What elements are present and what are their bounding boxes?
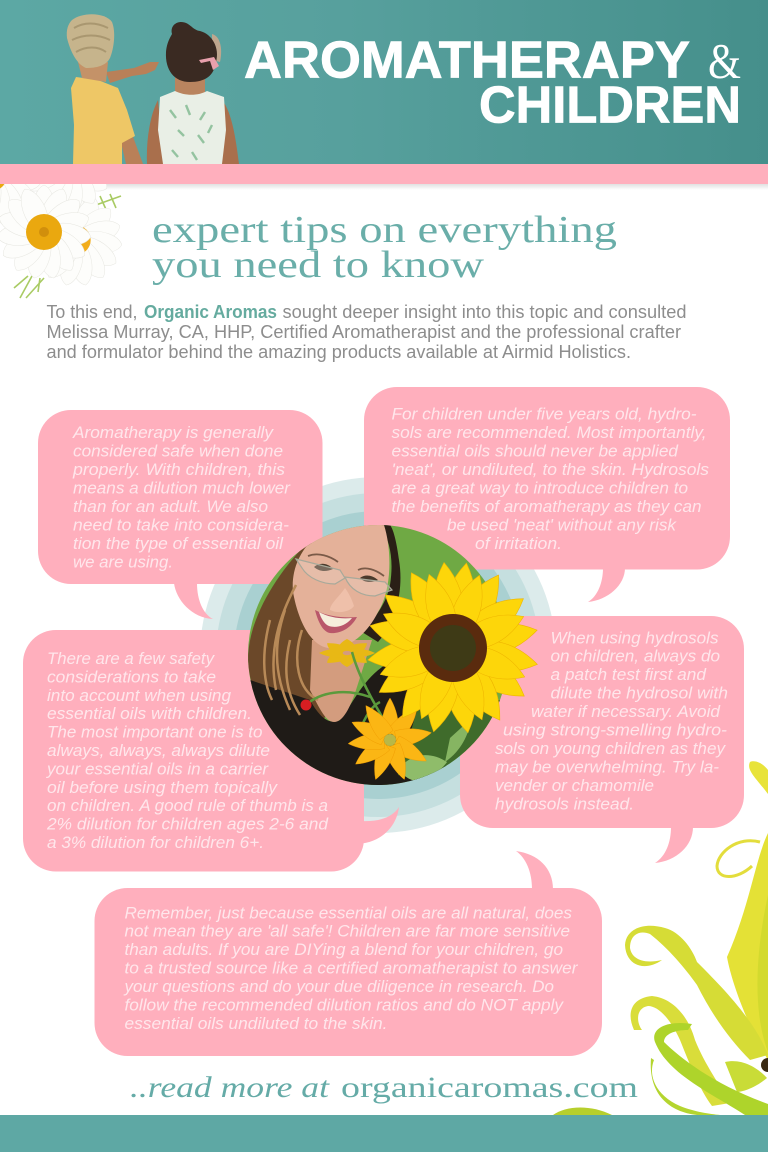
- bubble 3 text: The most important one is to: [47, 724, 262, 742]
- upper petal shadow: [757, 895, 768, 1052]
- bubble 2 text: of irritation.: [475, 535, 562, 553]
- bubble 4 text: When using hydrosols: [550, 629, 718, 647]
- bubble 5 text: to a trusted source like a certified aromatherapist to answer: [124, 960, 579, 978]
- flower centre: [761, 1058, 768, 1072]
- smile: [315, 610, 357, 633]
- bubble 4 text: using strong-smelling hydro-: [503, 722, 728, 740]
- ylang-ylang flower: [553, 761, 768, 1115]
- curled petal lower: [631, 996, 730, 1106]
- bubble 3 text: a 3% dilution for children 6+.: [47, 834, 264, 852]
- bubble 3 text: considerations to take: [47, 668, 216, 686]
- speech bubble 3: [23, 630, 399, 872]
- upper long petal: [727, 833, 768, 1060]
- concentric rings behind portrait: [200, 477, 556, 833]
- speech bubble 5: [94, 851, 602, 1056]
- bubble 4 text: may be overwhelming. Try la-: [495, 758, 720, 776]
- small yellow flower: [319, 639, 375, 667]
- main daisy: [0, 185, 92, 280]
- back daisy: [48, 198, 122, 286]
- nose: [330, 588, 354, 612]
- top curl: [749, 761, 768, 794]
- intro paragraph: To this end,: [46, 302, 138, 322]
- girl's arms: [147, 100, 239, 164]
- boy's hair: [67, 14, 114, 68]
- read more footer text: [130, 1071, 638, 1104]
- bubble 2 text: For children under five years old, hydro-: [392, 405, 697, 423]
- bubble 1 text: means a dilution much lower: [73, 480, 292, 498]
- red flower: [300, 700, 312, 710]
- girl's neck: [175, 76, 205, 98]
- bubble 3 text: [46, 650, 329, 852]
- glasses: [296, 559, 392, 596]
- grass background: [248, 525, 508, 785]
- girl's sunglasses: [199, 57, 219, 70]
- bubble 5 text: essential oils undiluted to the skin.: [124, 1015, 388, 1033]
- bubble 5 text: [123, 904, 579, 1033]
- bottom band: [0, 1115, 768, 1152]
- bottom-left petal: [553, 1107, 612, 1115]
- intro paragraph: [46, 302, 686, 362]
- upper daisy: [32, 184, 107, 207]
- bubble 2 text: essential oils should never be applied: [392, 442, 679, 460]
- bubble 1 text: Aromatherapy is generally: [72, 424, 275, 442]
- bubble 1 text: than for an adult. We also: [73, 498, 268, 516]
- far side of girl's face: [212, 34, 221, 62]
- bubble 2 text: 'neat', or undiluted, to the skin. Hydrosols: [392, 461, 709, 479]
- bubble 4 text: water if necessary. Avoid: [531, 703, 721, 721]
- eyebrows: [308, 554, 384, 576]
- bubble 4 text: hydrosols instead.: [495, 795, 634, 813]
- thin curl: [717, 841, 760, 876]
- hair: [248, 543, 326, 718]
- speech bubble 2: [364, 387, 730, 602]
- hair strands: [264, 585, 318, 715]
- bubble 2 text: are a great way to introduce children to: [392, 479, 688, 497]
- title: CHILDREN: [479, 76, 741, 134]
- eyes: [314, 564, 378, 582]
- bubble 3 text: into account when using: [47, 687, 232, 705]
- boy's shirt: [71, 77, 135, 164]
- bubble 5 text: your questions and do your due diligence in research. Do: [123, 978, 554, 996]
- corner daisy: [0, 184, 40, 224]
- bubble 2 text: be used 'neat' without any risk: [447, 516, 677, 534]
- bubble 3 text: There are a few safety: [47, 650, 216, 668]
- black top: [250, 665, 450, 785]
- bubble 1 text: we are using.: [73, 554, 173, 572]
- teeth: [319, 612, 352, 627]
- subtitle: [152, 209, 617, 286]
- intro paragraph: Melissa Murray, CA, HHP, Certified Aromatherapist and the professional crafter: [46, 322, 681, 342]
- bubble 5 text: not mean they are 'all safe'! Children are far more sensitive: [124, 923, 570, 941]
- subtitle: expert tips on everything: [152, 209, 617, 251]
- title: AROMATHERAPY: [244, 32, 690, 90]
- wide centre petal: [725, 1061, 767, 1092]
- bubble 4 text: a patch test first and: [550, 666, 707, 684]
- girl's dress: [158, 91, 226, 164]
- girl's hair: [166, 22, 217, 82]
- bubble 3 text: essential oils with children.: [47, 705, 252, 723]
- bubble 5 text: than adults. If you are DIYing a blend for your children, go: [124, 941, 563, 959]
- read more footer text: ..read more at: [130, 1071, 330, 1104]
- bubble 4 text: [495, 629, 728, 813]
- intro paragraph: and formulator behind the amazing products available at Airmid Holistics.: [46, 342, 631, 362]
- bubble 1 text: considered safe when done: [73, 442, 283, 460]
- bubble 1 text: properly. With children, this: [72, 461, 285, 479]
- daisy flowers: [0, 184, 122, 298]
- green leaves: [400, 755, 447, 780]
- bubble 5 text: follow the recommended dilution ratios and do NOT apply: [124, 996, 565, 1014]
- title: &: [708, 32, 741, 88]
- bubble 2 text: [392, 405, 709, 553]
- bubble 4 text: sols on young children as they: [495, 740, 727, 758]
- boy's pointing arm: [106, 62, 159, 83]
- boy's lower arm: [120, 134, 143, 164]
- dress print: [170, 105, 212, 160]
- bubble 2 text: sols are recommended. Most importantly,: [392, 424, 706, 442]
- title: [244, 32, 741, 134]
- lower green petal: [651, 1058, 720, 1115]
- bubble 5 text: Remember, just because essential oils are all natural, does: [124, 904, 572, 922]
- header photo: two children: [67, 14, 239, 164]
- bubble 3 text: 2% dilution for children ages 2-6 and: [46, 816, 329, 834]
- read more footer text: organicaromas.com: [341, 1071, 638, 1104]
- bubble 1 text: [72, 424, 292, 572]
- green twisted petal: [654, 1023, 768, 1115]
- subtitle: you need to know: [152, 244, 485, 286]
- bubble 1 text: tion the type of essential oil: [73, 535, 284, 553]
- chest skin: [310, 640, 372, 722]
- dark leaves behind bouquet: [398, 700, 500, 785]
- curly dark hair at right: [362, 525, 400, 642]
- bubble 4 text: dilute the hydrosol with: [550, 685, 728, 703]
- bubble 3 text: oil before using them topically: [47, 779, 279, 797]
- boy's hair texture: [72, 24, 110, 52]
- bubble 3 text: your essential oils in a carrier: [46, 760, 270, 778]
- sunflower: [366, 561, 540, 735]
- intro paragraph: sought deeper insight into this topic and consulted: [282, 302, 686, 322]
- curled petal upper: [625, 926, 768, 1060]
- bubble 3 text: always, always, always dilute: [47, 742, 270, 760]
- pink divider strip: [0, 164, 768, 190]
- face: [293, 523, 389, 648]
- portrait photo: [248, 523, 540, 785]
- bubble 3 text: on children. A good rule of thumb is a: [47, 797, 328, 815]
- flower stems: [309, 652, 383, 722]
- boy's neck: [78, 62, 108, 82]
- bubble 4 text: on children, always do: [550, 648, 720, 666]
- header band: [0, 0, 768, 164]
- bubble 2 text: the benefits of aromatherapy as they can: [392, 498, 702, 516]
- orange flower: [347, 698, 433, 782]
- speech bubble 4: [460, 616, 744, 863]
- bubble 4 text: vender or chamomile: [495, 777, 654, 795]
- speech bubble 1: [38, 410, 322, 619]
- bubble 1 text: need to take into considera-: [73, 516, 290, 534]
- intro paragraph: Organic Aromas: [144, 302, 277, 322]
- leaves: [14, 194, 121, 298]
